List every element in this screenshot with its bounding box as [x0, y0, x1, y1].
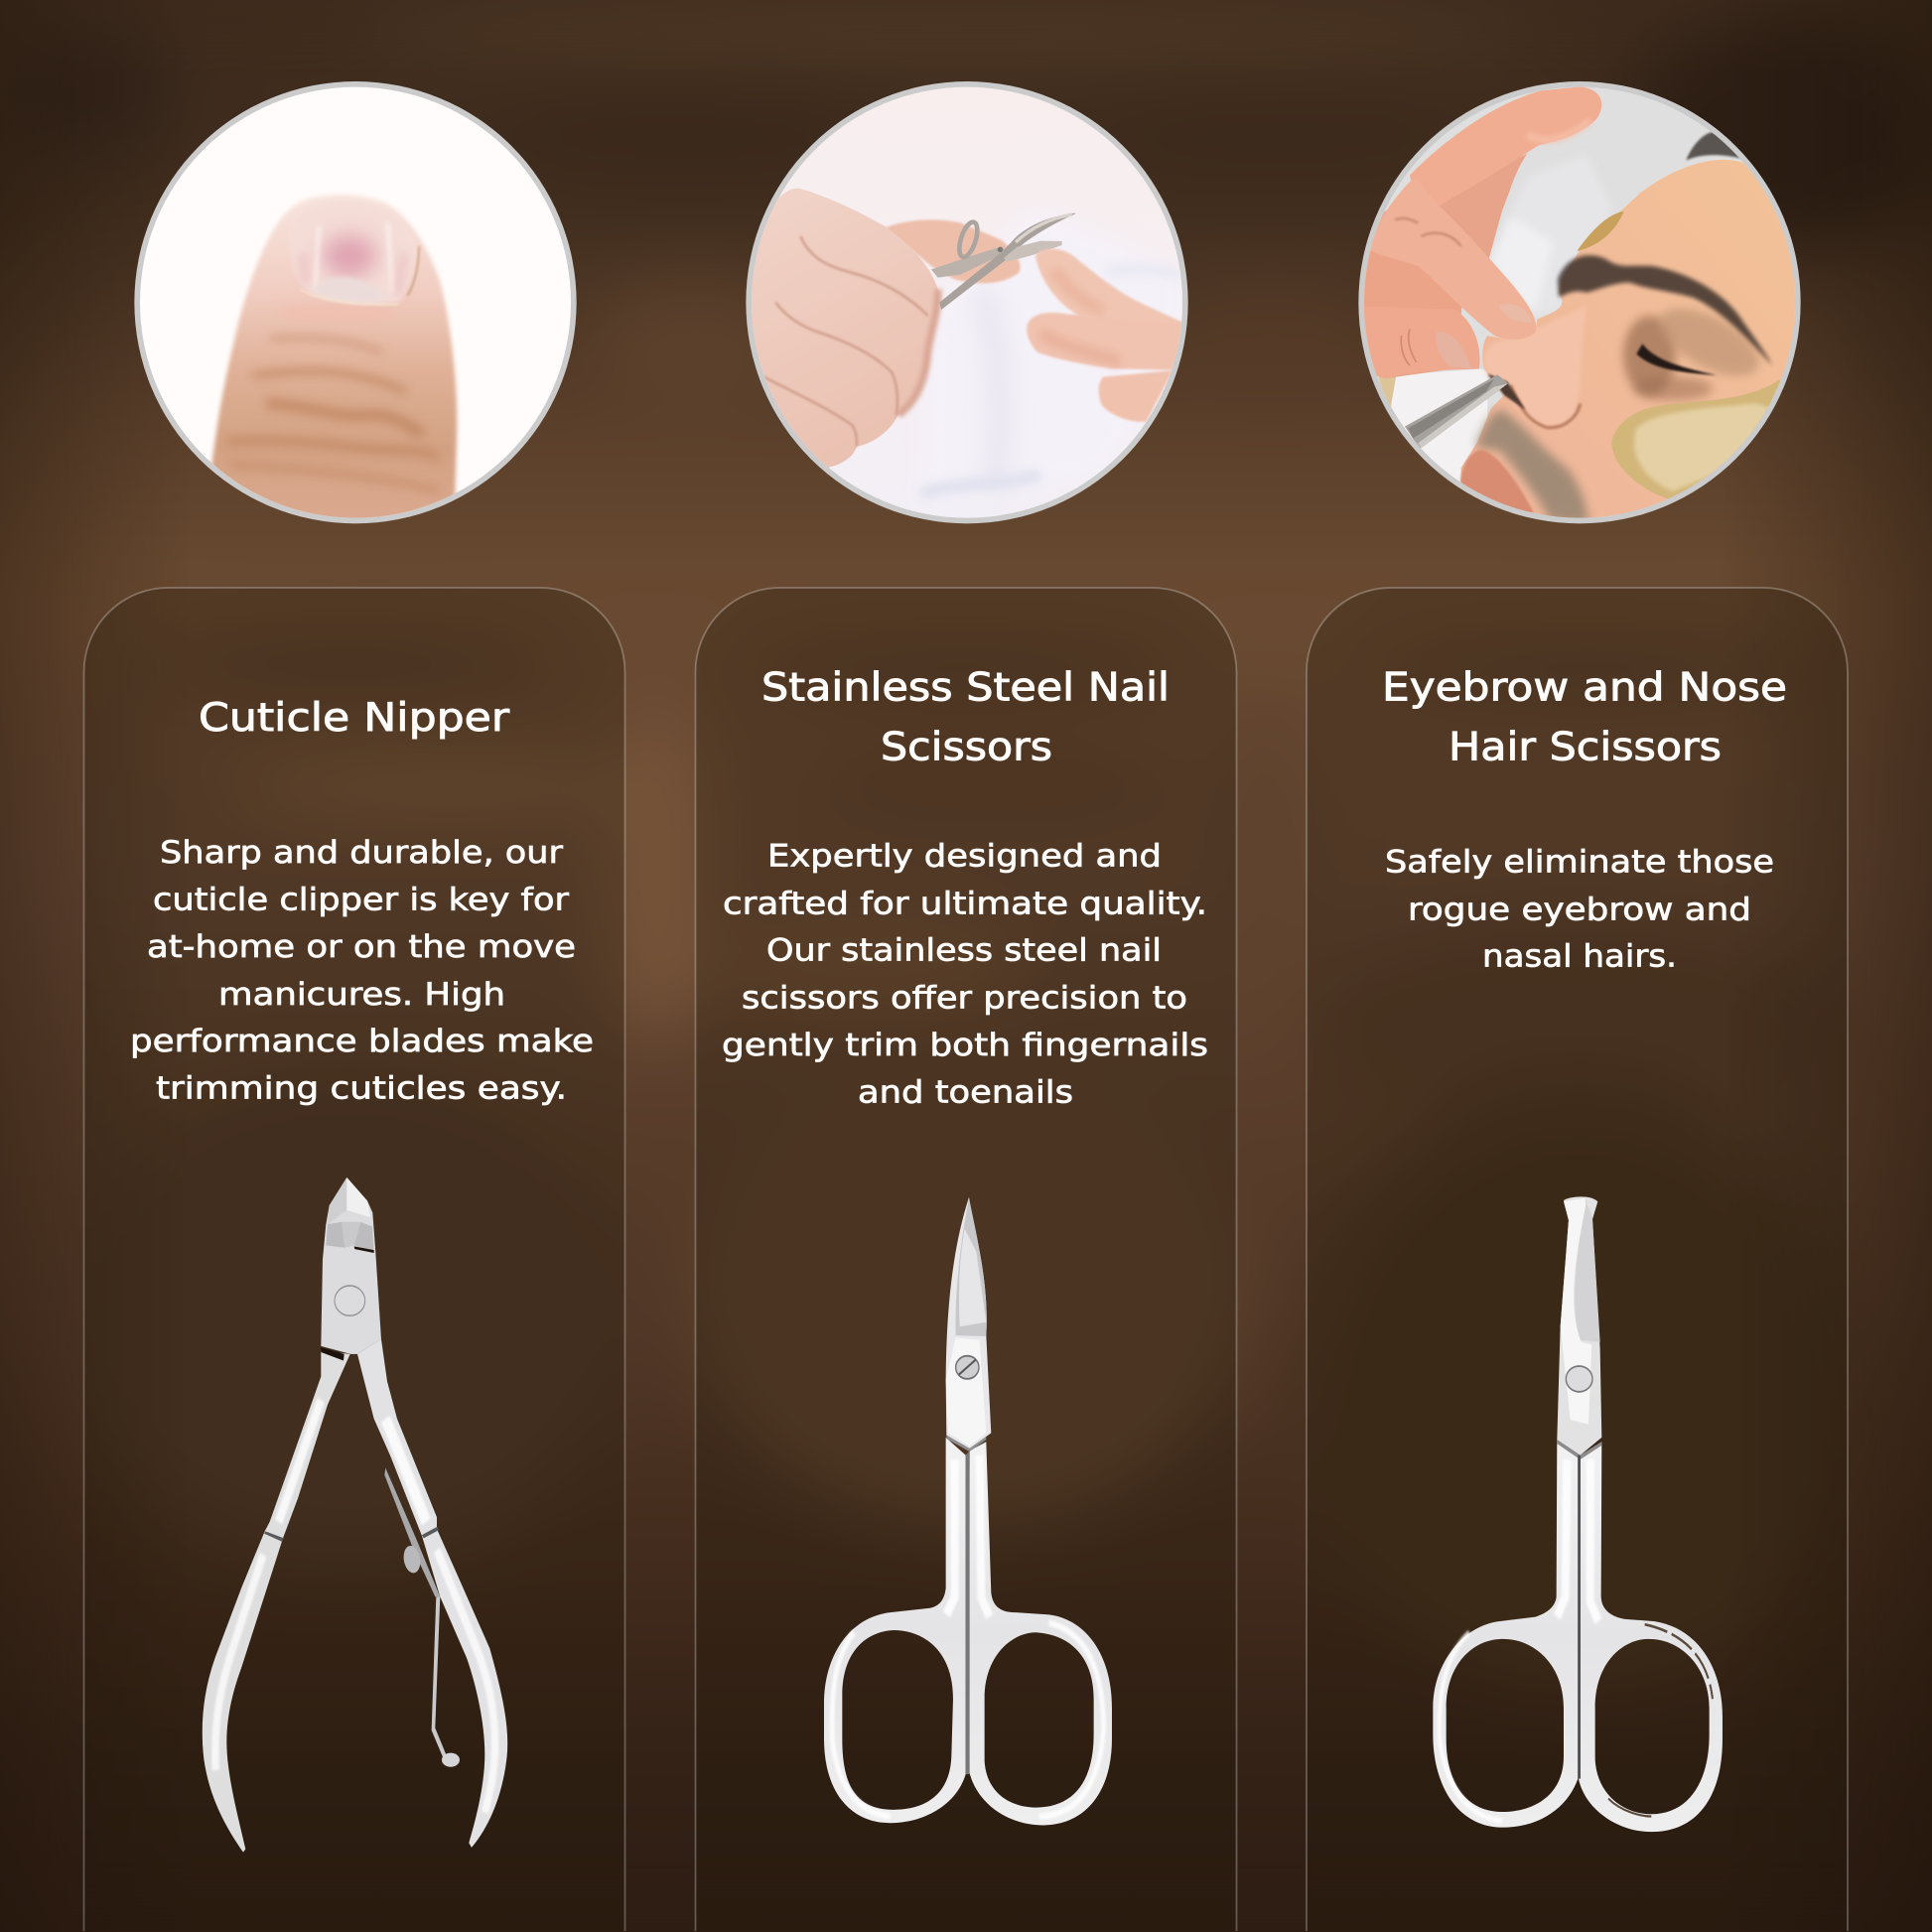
hand base — [1364, 209, 1461, 379]
panel: stainless steel nail scissors — [695, 588, 1237, 1931]
heading: Cuticle Nipper: Cuticle Nipper — [199, 696, 510, 741]
text block: nail scissors description — [722, 839, 1208, 1111]
heading: Stainless Steel Nail Scissors — [761, 666, 1170, 770]
nose — [1483, 306, 1587, 429]
photo: trimming nose hair on a man's face — [1355, 77, 1805, 527]
heading: Eyebrow and Nose Hair Scissors — [1382, 666, 1787, 770]
text block: nose hair scissors description: Safely eliminate those — [1385, 845, 1774, 881]
illustration: nail scissors tool — [824, 1197, 1112, 1825]
text block: cuticle nipper description: cuticle clipper is key for — [153, 883, 569, 918]
wax strip — [1611, 379, 1781, 498]
photo: trimming a nail with scissors — [743, 77, 1192, 527]
text block: nail scissors description: crafted for ultimate quality. — [723, 887, 1207, 922]
heading: Stainless Steel Nail Scissors: Stainless Steel Nail — [761, 666, 1170, 711]
text block: nose hair scissors description: rogue eyebrow and — [1408, 893, 1751, 928]
text block: cuticle nipper description — [130, 835, 594, 1107]
stubble — [1476, 410, 1588, 524]
thumb — [1358, 307, 1480, 378]
text block: cuticle nipper description: manicures. High — [218, 977, 505, 1013]
text block: cuticle nipper description: at-home or on the move — [147, 929, 576, 965]
lips — [1460, 450, 1534, 516]
top finger — [1410, 86, 1601, 208]
eye socket shadow — [1623, 316, 1676, 395]
illustration: nose hair scissors tool — [1433, 1196, 1723, 1832]
heading: Stainless Steel Nail Scissors: Scissors — [881, 726, 1052, 770]
text block: nail scissors description: gently trim both fingernails — [722, 1028, 1208, 1063]
text block: cuticle nipper description: trimming cuticles easy. — [156, 1071, 567, 1107]
index finger — [1368, 177, 1536, 340]
back palm — [1440, 153, 1527, 258]
panel: cuticle nipper — [83, 588, 625, 1931]
heading: Eyebrow and Nose Hair Scissors: Hair Scissors — [1449, 726, 1722, 770]
text block: nose hair scissors description: nasal hairs. — [1482, 939, 1677, 975]
heading: Eyebrow and Nose Hair Scissors: Eyebrow and Nose — [1382, 666, 1787, 711]
illustration: cuticle nipper tool — [203, 1177, 507, 1853]
tweezers — [1405, 374, 1508, 449]
closed eye — [1636, 344, 1717, 375]
text block: nail scissors description: and toenails — [858, 1075, 1073, 1111]
eyebrow — [1558, 255, 1772, 365]
text block: cuticle nipper description: performance blades make — [130, 1024, 594, 1059]
text block: nail scissors description: Our stainless steel nail — [766, 933, 1162, 969]
text block: nail scissors description: scissors offer precision to — [742, 981, 1187, 1017]
text block: nail scissors description: Expertly designed and — [767, 839, 1162, 875]
photo: fingernail with cuticle — [131, 77, 581, 541]
text block: cuticle nipper description: Sharp and durable, our — [160, 835, 563, 871]
face — [1461, 160, 1805, 527]
text block: nose hair scissors description — [1385, 845, 1774, 975]
panel: eyebrow and nose hair scissors — [1307, 588, 1848, 1931]
